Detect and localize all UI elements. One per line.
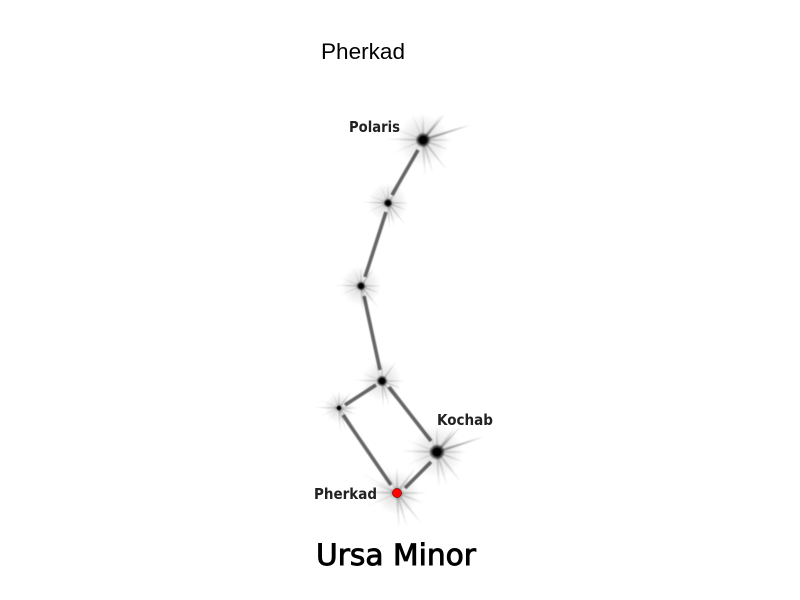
- star: Polaris: [387, 112, 470, 176]
- constellation lines: [343, 150, 431, 488]
- star: Kochab: [401, 424, 483, 488]
- star: bowl top: [355, 360, 404, 408]
- label: Kochab: Kochab: [437, 411, 493, 429]
- star: second in handle: [362, 183, 410, 229]
- heading: Pherkad: Pherkad: [321, 39, 405, 64]
- title: Ursa Minor: Ursa Minor: [316, 538, 476, 572]
- label: Pherkad: Pherkad: [314, 485, 377, 503]
- label: Polaris: Polaris: [349, 118, 400, 136]
- star: Pherkad (red highlight): [359, 465, 427, 529]
- star: third in handle: [335, 266, 383, 312]
- star: bowl left: [315, 389, 359, 432]
